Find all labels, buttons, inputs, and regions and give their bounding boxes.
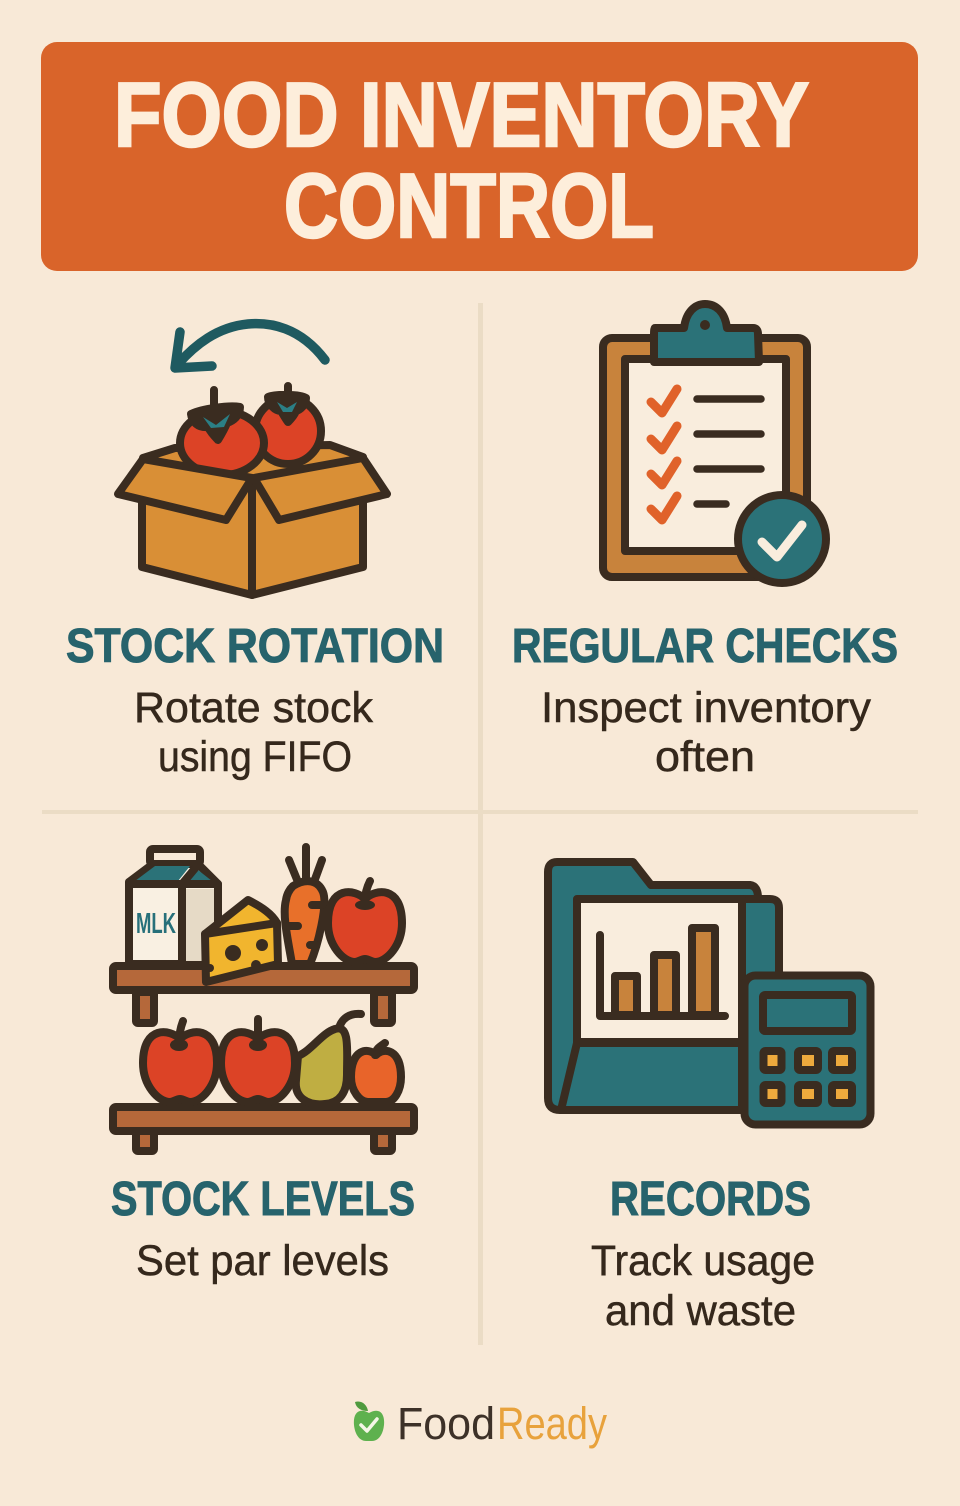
calculator xyxy=(744,976,870,1124)
panel: records xyxy=(548,862,870,1335)
check badge xyxy=(738,495,826,583)
heading: REGULAR CHECKS xyxy=(512,619,898,673)
panel: stock rotation xyxy=(66,324,444,781)
cheese xyxy=(205,900,278,982)
small orange apple xyxy=(351,1043,401,1102)
description: using FIFO xyxy=(158,733,352,781)
shelf 1 xyxy=(113,966,414,1023)
wordmark: Food xyxy=(397,1398,495,1449)
icon: apple check xyxy=(354,1402,384,1441)
heading: RECORDS xyxy=(610,1172,811,1226)
panel: stock levels xyxy=(111,847,415,1285)
title banner: FOOD INVENTORY xyxy=(114,65,809,166)
description: Inspect inventory xyxy=(541,684,872,732)
icon: stocked shelves xyxy=(113,847,414,1151)
bar chart xyxy=(600,928,725,1016)
description: Set par levels xyxy=(136,1237,389,1285)
description: often xyxy=(655,733,755,781)
heading: STOCK LEVELS xyxy=(111,1172,415,1226)
panel: regular checks xyxy=(512,304,898,781)
milk label: MLK xyxy=(136,908,176,940)
checklist marks xyxy=(651,389,677,520)
icon: rotation arrow xyxy=(175,324,325,368)
apple top xyxy=(328,881,402,962)
right tomato xyxy=(255,386,321,464)
description: and waste xyxy=(605,1287,796,1335)
icon: folder and calculator xyxy=(548,862,870,1124)
wordmark: Ready xyxy=(497,1398,607,1449)
heading: STOCK ROTATION xyxy=(66,619,444,673)
icon: clipboard xyxy=(603,304,826,583)
folder xyxy=(548,862,779,1110)
milk carton xyxy=(129,849,218,964)
apple left xyxy=(143,1021,217,1102)
icon: box with tomatoes xyxy=(118,386,387,595)
description: Rotate stock xyxy=(134,684,373,732)
apple middle xyxy=(221,1019,295,1102)
carrot xyxy=(285,847,324,964)
description xyxy=(541,684,872,781)
logo: FoodReady xyxy=(354,1398,607,1449)
description xyxy=(134,684,373,781)
clip xyxy=(654,304,759,362)
front tomato xyxy=(180,390,264,475)
description xyxy=(591,1237,815,1335)
title banner xyxy=(41,42,918,271)
title banner: CONTROL xyxy=(284,156,654,257)
pear xyxy=(296,1014,361,1104)
description: Track usage xyxy=(591,1237,815,1285)
checklist lines xyxy=(697,399,761,504)
shelf 2 xyxy=(113,1107,414,1151)
